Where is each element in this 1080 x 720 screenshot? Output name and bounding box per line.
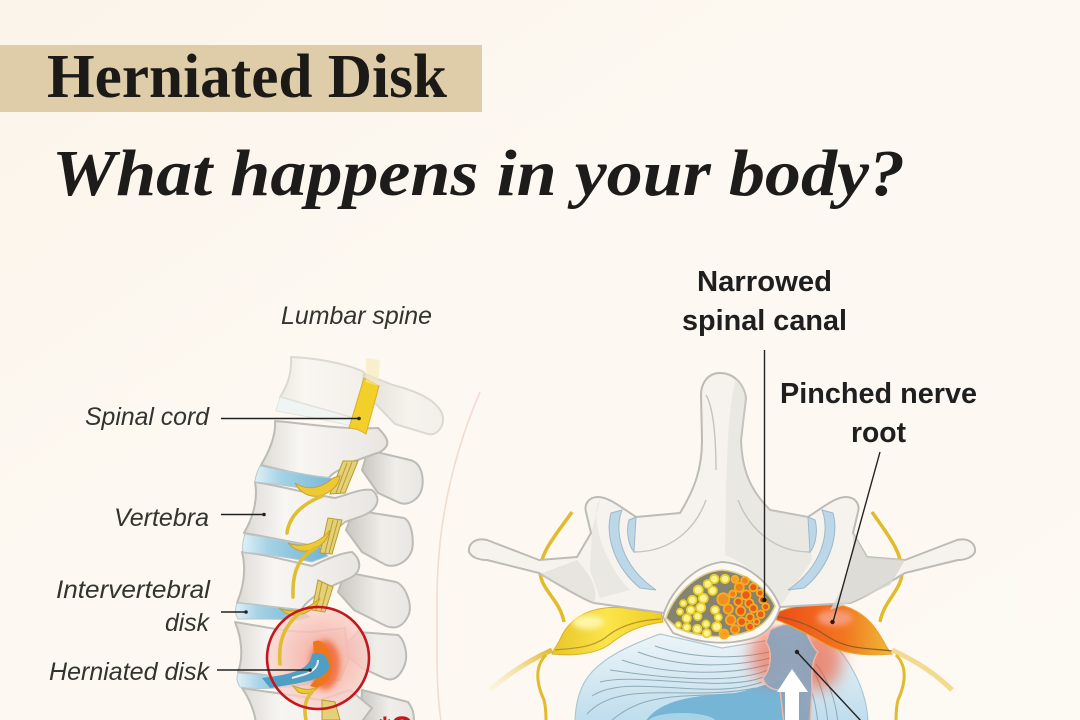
orange fibres [717,576,769,638]
leader lines: spine parts [217,417,361,672]
herniated disk with red ring [262,607,369,709]
lamina contour lines [634,395,810,552]
left nerve [490,512,663,720]
label: narrowed spinal canal: spinal canal [682,305,847,337]
lumbar wings [338,450,423,720]
faded top vertebra [276,357,443,434]
spinal canal with nerve fibres [663,562,780,643]
intervertebral disks [236,466,342,689]
red highlight circle fill [267,607,369,709]
labels: spine parts: Intervertebral [56,576,212,604]
labels: spine parts: Vertebra [114,504,209,532]
yellow fibres [676,575,729,637]
red inflammation glow [750,626,842,690]
label: pinched nerve root [780,378,977,449]
label: narrowed spinal canal [682,266,847,337]
herniated bulge [763,623,818,720]
vertebra bodies [235,421,387,720]
label: narrowed spinal canal: Narrowed [697,266,832,298]
spinal cord and nerve roots [279,358,380,720]
leader lines: top view [762,350,880,720]
illustration: vertebra top view [469,373,975,720]
body outline curve [437,392,480,720]
labels: spine parts: Herniated disk [49,658,210,686]
disk nucleus [646,684,783,720]
label: lumbar spine: Lumbar spine [281,302,432,330]
vertebra arch bone [469,373,975,613]
white arrow [777,669,808,720]
intervertebral disk annulus [575,632,868,720]
labels: spine parts [49,403,212,686]
label: pinched nerve root: Pinched nerve [780,378,977,410]
labels: spine parts: Spinal cord [85,403,210,431]
label: pinched nerve root: root [851,417,906,449]
right nerve, pinched [772,512,952,720]
title band: Herniated Disk [47,43,448,111]
arch shading [540,378,905,610]
heading: What happens in your body? [52,137,905,210]
illustration: lumbar spine side view [235,357,443,720]
facet joints [609,510,835,590]
labels: spine parts: disk [165,609,210,637]
